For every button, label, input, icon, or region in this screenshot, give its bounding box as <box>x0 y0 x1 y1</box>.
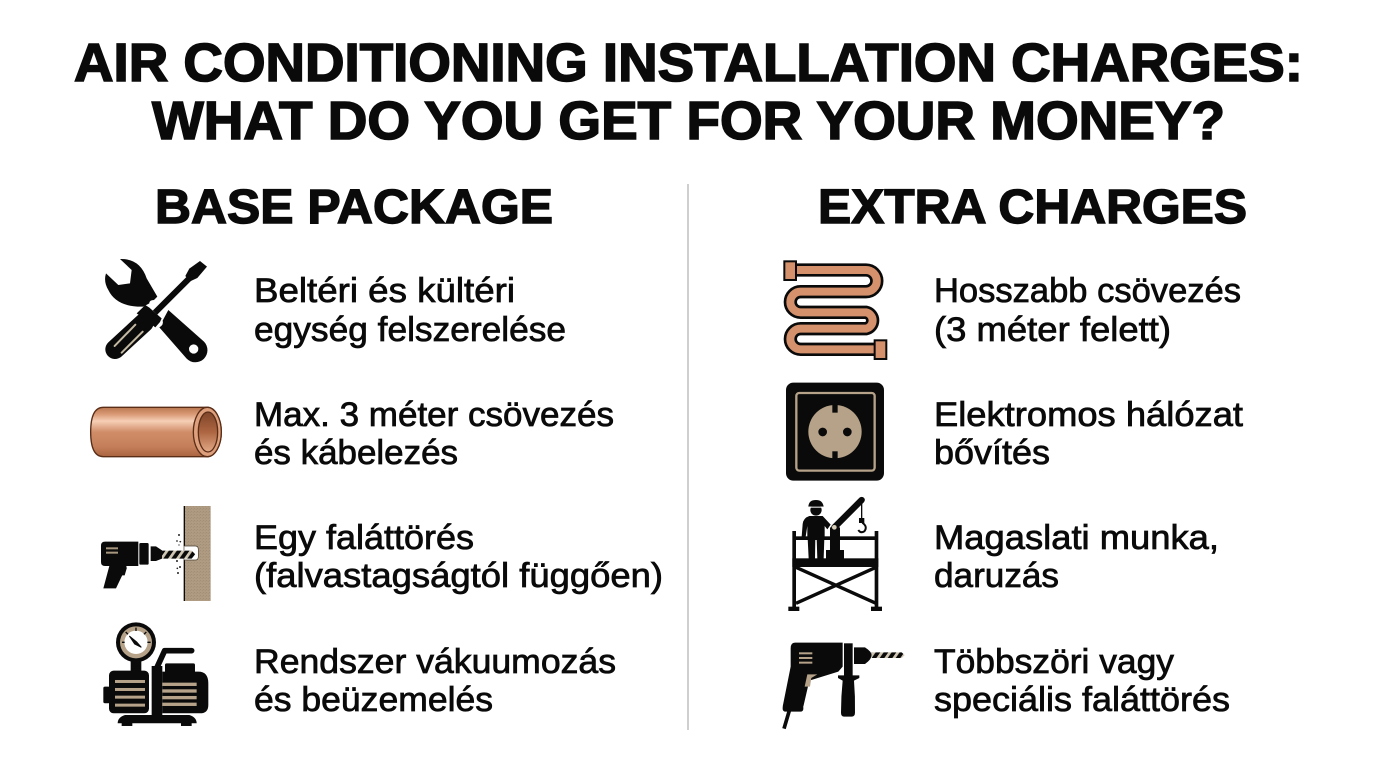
text: indoor and outdoor unit: Beltéri és kültéri <box>254 272 515 310</box>
text: electrical network extension <box>934 396 1244 472</box>
text: max 3 m piping: és kábelezés <box>254 434 458 472</box>
icon: copper pipe <box>91 407 221 457</box>
icon: hammer drill <box>783 643 905 729</box>
title <box>74 33 1303 151</box>
text: longer piping: (3 méter felett) <box>934 311 1171 349</box>
title: AIR CONDITIONING INSTALLATION CHARGES: <box>74 33 1303 93</box>
text: vacuuming and commissioning <box>254 643 616 719</box>
text: one wall penetration <box>254 519 663 595</box>
text: max 3 m piping <box>254 396 614 472</box>
title: WHAT DO YOU GET FOR YOUR MONEY? <box>152 91 1225 151</box>
text: electrical network extension: bővítés <box>934 434 1050 472</box>
heading: base package: BASE PACKAGE <box>155 181 553 234</box>
text: indoor and outdoor unit <box>254 272 566 349</box>
text: multiple or special wall penetration <box>934 643 1230 719</box>
icon: drill into wall <box>101 506 211 601</box>
text: multiple or special wall penetration: speciális faláttörés <box>934 681 1230 719</box>
panel: base package <box>91 181 663 726</box>
text: work at height and craning: daruzás <box>934 557 1059 595</box>
text: electrical network extension: Elektromos hálózat <box>934 396 1244 434</box>
icon: wrench and screwdriver <box>105 259 207 362</box>
text: work at height and craning: Magaslati munka, <box>934 519 1219 557</box>
text: vacuuming and commissioning: és beüzemelés <box>254 681 493 719</box>
icon: serpentine copper pipe <box>784 261 886 359</box>
text: one wall penetration: (falvastagságtól függően) <box>254 557 663 595</box>
panel: extra charges <box>783 181 1247 729</box>
text: longer piping: Hosszabb csövezés <box>934 272 1241 310</box>
text: one wall penetration: Egy faláttörés <box>254 519 474 557</box>
text: vacuuming and commissioning: Rendszer vákuumozás <box>254 643 616 681</box>
text: indoor and outdoor unit: egység felszerelése <box>254 311 566 349</box>
text: work at height and craning <box>934 519 1219 595</box>
icon: scaffold with worker and crane <box>788 500 882 611</box>
text: max 3 m piping: Max. 3 méter csövezés <box>254 396 614 434</box>
heading: extra charges: EXTRA CHARGES <box>818 181 1247 234</box>
icon: vacuum pump with gauge <box>103 622 208 726</box>
icon: electrical socket <box>786 383 884 481</box>
text: longer piping <box>934 272 1241 349</box>
text: multiple or special wall penetration: Többszöri vagy <box>934 643 1174 681</box>
